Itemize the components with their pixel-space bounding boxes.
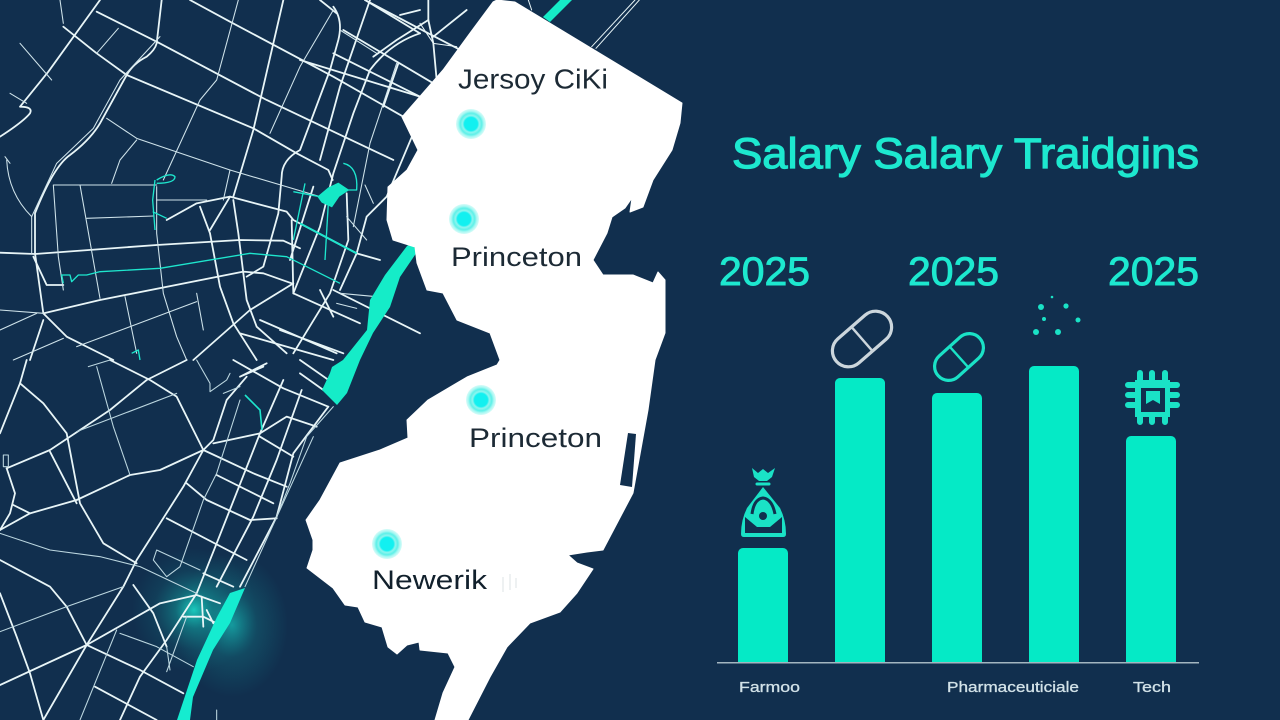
axis label: tech: Tech [1133,679,1171,696]
label: Jersey City: Jersoy CiKi [458,64,608,94]
marker: Princeton north [449,204,479,234]
marker: Princeton south [466,385,496,415]
icon: capsule outline [826,305,898,373]
icon: capsule teal [929,328,989,386]
teal coast strip south [177,588,245,720]
bar: tech [1126,436,1176,662]
streets near north coast [300,0,639,107]
year label two: 2025 [908,250,999,294]
bar: pharma two [932,393,982,662]
icon: dots [1033,296,1080,335]
label: Princeton south: Princeton [469,423,602,453]
lake on state [620,433,636,487]
axis label: pharmaceuticals: Pharmaceuticiale [947,679,1079,696]
teal routes [62,163,357,360]
street map [0,0,639,720]
marker: Jersey City [456,109,486,139]
teal coast strip middle [322,245,417,405]
bar chart [717,366,1199,664]
axis line [717,662,1199,664]
upper streets [0,0,420,360]
bar: pharma one [835,378,885,662]
year label one: 2025 [719,250,810,294]
faint smudge beside Newark [503,574,516,592]
icon: money bag [741,468,786,537]
label: Newark: Newerik [372,565,488,595]
lower streets [0,360,333,720]
year label three: 2025 [1108,250,1199,294]
icon: chip [1128,373,1177,422]
glow at coast [132,548,288,697]
bar: research [1029,366,1079,662]
axis label: finance: Farmoo [739,679,800,696]
teal coast strip north [543,0,572,22]
marker: Newark [372,529,402,559]
title: Salary Salary Traidgins [732,130,1199,178]
label: Princeton north: Princeton [451,242,582,272]
teal route south [245,395,262,430]
state silhouette [306,0,682,720]
bar: finance [738,548,788,662]
